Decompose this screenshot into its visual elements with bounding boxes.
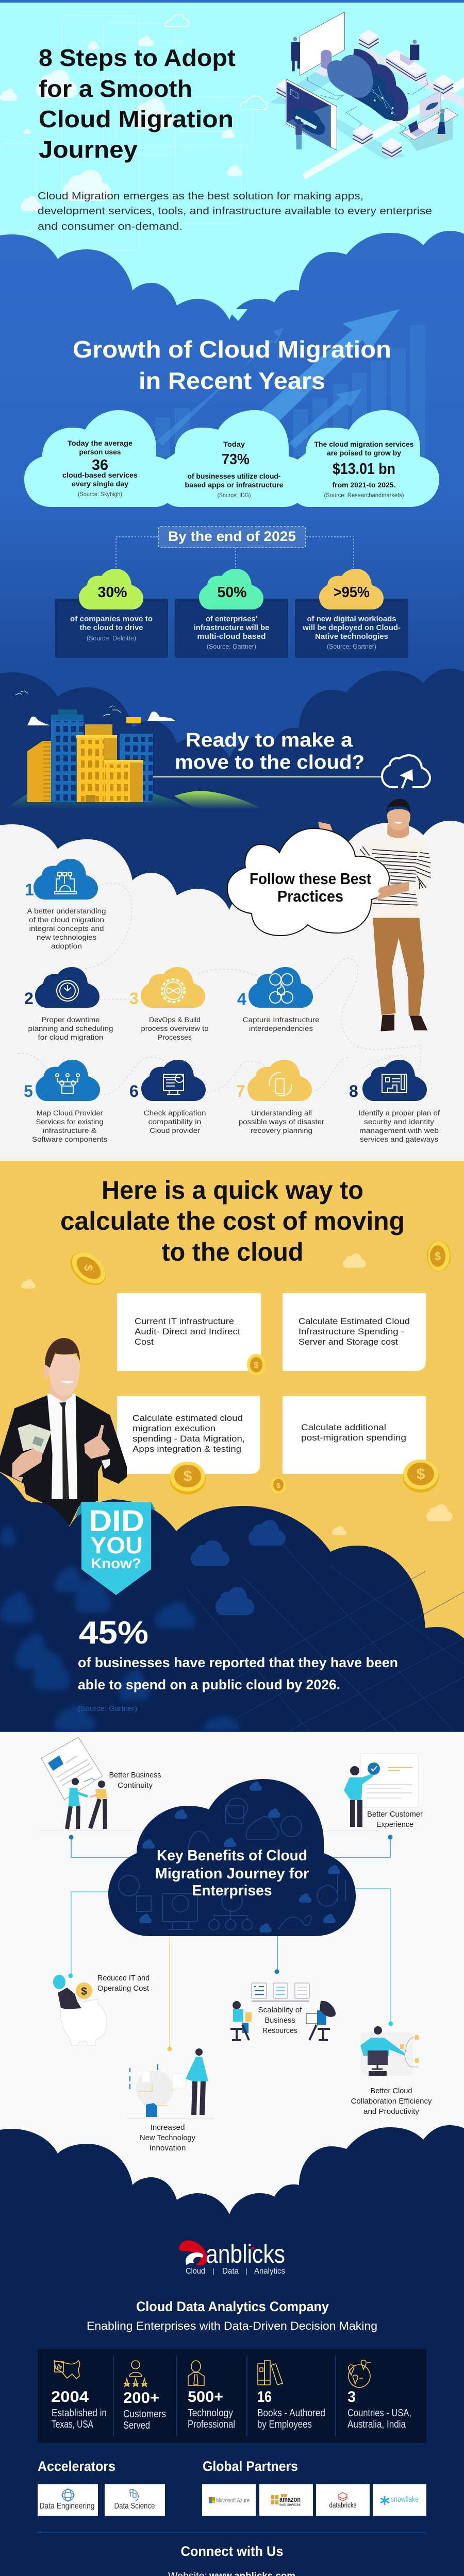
- step 3: Processes: [158, 1033, 192, 1041]
- logo: anblicks: Analytics: [254, 2267, 285, 2276]
- step 1: [25, 859, 106, 950]
- card: post-migration spending: Calculate additional: [301, 1422, 386, 1432]
- global partners: amazon: [279, 2495, 301, 2504]
- heading: cloud data analytics company: [87, 2299, 377, 2332]
- benefit: better cloud collaboration: [351, 2026, 432, 2116]
- step 7: possible ways of disaster: [239, 1117, 324, 1126]
- stat: 45 percent of businesses: 45%: [79, 1615, 148, 1651]
- stat: 16: by Employees: [257, 2419, 312, 2430]
- card: over 95% of workloads: [295, 569, 408, 658]
- global partners: Microsoft Azure: [216, 2497, 250, 2504]
- accelerators: Data Science: [114, 2502, 155, 2511]
- heading: quick way to calculate: to the cloud: [162, 1238, 303, 1266]
- heading: growth of cloud migration: Growth of Cloud Migration: [73, 336, 391, 363]
- logo: anblicks: |: [212, 2267, 214, 2275]
- accelerators: Data Engineering: [39, 2502, 95, 2511]
- heading: ready to make a move: Ready to make a: [186, 730, 353, 751]
- step 6: compatibility in: [148, 1117, 201, 1126]
- step 6: 6: [129, 1082, 139, 1100]
- stat: 36 cloud-based services: Today the average: [68, 439, 132, 447]
- stat: 3: Australia, India: [347, 2419, 406, 2430]
- card: 30% of companies: 30%: [98, 584, 127, 601]
- stat: 36 cloud-based services: every single day: [72, 480, 128, 488]
- heading: quick way to calculate: calculate the cost of moving: [60, 1207, 405, 1235]
- stat: 16: 16: [257, 2388, 272, 2405]
- icon: coins: $: [184, 1468, 192, 1485]
- card: 50% of enterprises: [175, 569, 288, 658]
- heading: by the end of 2025: [158, 527, 306, 548]
- stat: 500+: 500+: [188, 2388, 223, 2405]
- card: current IT audit: Cost: [135, 1337, 154, 1347]
- step 3: 3: [129, 989, 139, 1008]
- step 7: recovery planning: [251, 1126, 312, 1134]
- card: 30% of companies: [55, 569, 168, 658]
- benefit: better cloud collaboration: Better Cloud: [370, 2087, 412, 2095]
- stat: 2004: 2004: [51, 2388, 89, 2405]
- benefit: reduced IT and operating cost: $: [81, 1986, 87, 1997]
- stat: $13.01 bn: from 2021-to 2025.: [332, 481, 396, 489]
- heading: ready to make a move: move to the cloud?: [175, 752, 364, 773]
- step 5: Software components: [32, 1135, 107, 1143]
- heading: cloud data analytics company: Cloud Data Analytics Company: [136, 2299, 329, 2314]
- global partners: [202, 2459, 426, 2516]
- benefit: increased new technology innovation: New Technology: [140, 2133, 195, 2142]
- benefit: scalability of business resources: Business: [265, 2016, 295, 2025]
- step 3: [129, 967, 209, 1041]
- benefit: scalability of business resources: [230, 1983, 336, 2040]
- stat: 200+: 200+: [123, 2389, 159, 2406]
- stat: 200+: [123, 2361, 166, 2431]
- step 7: 7: [236, 1082, 245, 1100]
- card: migration execution spending: Apps integration & testing: [132, 1444, 241, 1454]
- card: post-migration spending: post-migration spending: [301, 1433, 406, 1443]
- heading: hero title: 8 Steps to Adopt: [39, 44, 236, 71]
- card: migration execution spending: migration execution: [132, 1423, 216, 1433]
- step 8: [349, 1060, 440, 1143]
- accelerators: [38, 2459, 165, 2516]
- icon: coins: $: [254, 1360, 259, 1370]
- presenter: businessman with money: [0, 1338, 127, 1526]
- step 5: Services for existing: [36, 1117, 103, 1126]
- panel: cost calculation: [0, 1161, 464, 1732]
- step 8: management with web: [359, 1126, 439, 1134]
- logo: anblicks: [179, 2240, 285, 2276]
- benefit: better cloud collaboration: and Productivity: [363, 2107, 419, 2116]
- card: over 95% of workloads: (Source: Gartner): [327, 642, 376, 650]
- connect with us: [88, 2544, 375, 2576]
- step 5: infrastructure &: [43, 1126, 97, 1134]
- stat: 2004: Established in: [52, 2408, 107, 2419]
- logo: anblicks: anblicks: [206, 2240, 285, 2268]
- benefit: better cloud collaboration: Collaboration Efficiency: [351, 2097, 432, 2106]
- step 6: Check application: [143, 1109, 206, 1117]
- benefit: reduced IT and operating cost: Operating Cost: [97, 1984, 150, 1993]
- stat: 73% of businesses: [185, 440, 284, 499]
- card: 30% of companies: the cloud to drive: [79, 623, 143, 632]
- step 1: of the cloud migration: [29, 916, 104, 924]
- stat: 16: Books - Authored: [257, 2408, 325, 2419]
- heading: quick way to calculate: [60, 1176, 405, 1266]
- benefit: better customer experience: Experience: [376, 1820, 413, 1829]
- logo: anblicks: Cloud: [186, 2267, 205, 2276]
- benefit: better customer experience: [328, 1754, 423, 1831]
- stat: 36 cloud-based services: cloud-based services: [62, 471, 138, 479]
- stat: $13.01 bn: $13.01 bn: [333, 460, 395, 478]
- stat: 45 percent of businesses: (Source: Gartner): [78, 1704, 137, 1713]
- step 2: planning and scheduling: [28, 1024, 113, 1032]
- card: 50% of enterprises: multi-cloud based: [197, 632, 266, 641]
- heading: growth of cloud migration: in Recent Years: [139, 367, 325, 394]
- stat: 500+: [188, 2361, 235, 2430]
- step 1: A better understanding: [27, 907, 106, 915]
- stat: $13.01 bn: (Source: Researchandmarkets): [324, 492, 404, 499]
- global partners: snowflake: [391, 2495, 419, 2504]
- step 6: Cloud provider: [150, 1126, 200, 1134]
- card: estimated infrastructure spending: Server and Storage cost: [299, 1337, 398, 1347]
- stat: 3: Countries - USA,: [347, 2408, 411, 2419]
- stat: 3: [347, 2360, 411, 2430]
- step 4: 4: [237, 990, 246, 1008]
- connectors: [68, 1835, 393, 2052]
- presenter: man in striped sweater: [355, 799, 431, 1031]
- stat: 3: 3: [347, 2388, 356, 2405]
- heading: quick way to calculate: Here is a quick way to: [102, 1176, 363, 1205]
- heading: hero title: Cloud Migration: [39, 106, 234, 132]
- card: estimated infrastructure spending: [283, 1293, 426, 1371]
- speech bubble: follow these best practices: Follow these Best: [250, 870, 371, 888]
- heading: cloud data analytics company: Enabling Enterprises with Data-Driven Decision Making: [87, 2319, 377, 2332]
- text block: hero intro: [38, 191, 432, 232]
- logo: anblicks: Data: [222, 2267, 239, 2276]
- heading: hero title: for a Smooth: [39, 75, 192, 102]
- step 1: new technologies: [37, 933, 96, 941]
- card: 30% of companies: (Source: Deloitte): [87, 634, 136, 642]
- stat: 500+: Professional: [188, 2419, 235, 2430]
- benefit: reduced IT and operating cost: Reduced IT and: [97, 1974, 150, 1982]
- card: over 95% of workloads: will be deployed on Cloud-: [302, 623, 401, 632]
- step 1: integral concepts and: [29, 924, 104, 933]
- step 4: [237, 967, 320, 1032]
- step 8: security and identity: [364, 1117, 434, 1126]
- step 7: [236, 1060, 324, 1134]
- ribbon: did you know: DID: [89, 1504, 144, 1538]
- stat: $13.01 bn: The cloud migration services: [314, 440, 414, 448]
- step 5: [24, 1060, 107, 1143]
- stat: 500+: Technology: [188, 2408, 233, 2419]
- stat: 36 cloud-based services: [62, 439, 138, 498]
- benefit: increased new technology innovation: Innovation: [150, 2144, 186, 2153]
- benefit: reduced IT and operating cost: [53, 1974, 150, 2045]
- panel: company stats: [38, 2349, 426, 2443]
- card: migration execution spending: Calculate estimated cloud: [132, 1413, 243, 1423]
- benefit: better business continuity: [39, 1737, 161, 1831]
- illustration: city: [6, 691, 263, 809]
- card: current IT audit: Current IT infrastructure: [135, 1316, 234, 1326]
- logo: anblicks: |: [245, 2267, 247, 2275]
- icon: coins: $: [276, 1481, 280, 1489]
- stat: 16: [257, 2361, 325, 2430]
- icon: cloud upload: [382, 755, 430, 788]
- step 2: [24, 967, 113, 1041]
- ribbon: did you know: [75, 1502, 155, 1595]
- speech bubble: follow these best practices: [227, 822, 409, 936]
- stat: 36 cloud-based services: (Source: Skyhigh): [78, 490, 122, 498]
- card: over 95% of workloads: of new digital workloads: [307, 615, 396, 623]
- stat: 36 cloud-based services: 36: [92, 457, 108, 473]
- global partners: databricks: [329, 2501, 357, 2509]
- benefit: increased new technology innovation: [127, 2048, 213, 2153]
- card: 50% of enterprises: infrastructure will be: [194, 623, 269, 632]
- stat: 73% of businesses: of businesses utilize cloud-: [188, 472, 281, 480]
- text block: hero intro: Cloud Migration emerges as the best solution for making apps,: [38, 191, 363, 202]
- step 2: for cloud migration: [38, 1033, 103, 1041]
- card: 30% of companies: of companies move to: [70, 615, 153, 623]
- text block: hero intro: and consumer on-demand.: [38, 221, 183, 232]
- stat: 200+: Served: [123, 2420, 150, 2431]
- stat: 45 percent of businesses: able to spend on a public cloud by 2026.: [78, 1677, 340, 1692]
- card: over 95% of workloads: Native technologies: [315, 632, 388, 641]
- stat: 200+: Customers: [123, 2409, 166, 2420]
- panel: footer background: [0, 2125, 464, 2576]
- card: estimated infrastructure spending: Calculate Estimated Cloud: [299, 1316, 410, 1326]
- speech bubble: follow these best practices: Practices: [277, 887, 343, 905]
- heading: growth of cloud migration: [73, 336, 391, 394]
- panel: ready to move: [0, 669, 464, 1200]
- icon: coins: [64, 1241, 451, 1495]
- card: over 95% of workloads: >95%: [334, 584, 370, 601]
- stat: $13.01 bn: are poised to grow by: [327, 449, 401, 457]
- step 3: DevOps & Build: [149, 1015, 201, 1024]
- global partners: Global Partners: [203, 2459, 298, 2474]
- icon: coins: $: [82, 1265, 95, 1271]
- stat: 2004: [51, 2361, 107, 2430]
- panel: growth of cloud migration: [0, 231, 464, 762]
- benefit: increased new technology innovation: Increased: [151, 2123, 185, 2132]
- icon: coins: $: [435, 1250, 441, 1263]
- benefit: better business continuity: Better Business: [109, 1771, 161, 1780]
- card: 50% of enterprises: 50%: [218, 584, 247, 601]
- central cloud: key benefits: [108, 1779, 356, 1936]
- step 4: Capture Infrastructure: [242, 1015, 320, 1024]
- stat: 73% of businesses: based apps or infrastructure: [185, 481, 284, 489]
- global partners: web services: [279, 2502, 301, 2507]
- step 8: Identify a proper plan of: [358, 1109, 440, 1117]
- stat: 73% of businesses: (Source: IDG): [218, 492, 251, 499]
- heading: ready to make a move: [175, 730, 364, 773]
- heading: by the end of 2025: By the end of 2025: [168, 529, 296, 544]
- ribbon: did you know: YOU: [90, 1532, 143, 1558]
- stat: 73% of businesses: 73%: [222, 451, 250, 468]
- benefit: scalability of business resources: Resources: [262, 2026, 297, 2035]
- panel: key benefits: [0, 1732, 464, 2227]
- card: migration execution spending: spending - Data Migration,: [132, 1434, 245, 1444]
- icon: coins: $: [417, 1466, 425, 1483]
- card: migration execution spending: [117, 1396, 260, 1474]
- card: estimated infrastructure spending: Infrastructure Spending -: [299, 1327, 404, 1336]
- card: current IT audit: Audit- Direct and Indirect: [135, 1327, 240, 1336]
- central cloud: key benefits: Key Benefits of Cloud: [157, 1848, 307, 1864]
- stat: 45 percent of businesses: [78, 1615, 398, 1713]
- step 5: 5: [24, 1082, 33, 1100]
- stat: $13.01 bn: [314, 440, 414, 499]
- step 8: 8: [349, 1082, 358, 1100]
- card: 50% of enterprises: of enterprises': [206, 615, 257, 623]
- stat: 73% of businesses: Today: [223, 440, 245, 448]
- benefit: better business continuity: Continuity: [118, 1781, 153, 1790]
- central cloud: key benefits: Enterprises: [192, 1883, 272, 1899]
- step 8: services and gateways: [360, 1135, 438, 1143]
- step 2: Proper downtime: [41, 1015, 100, 1024]
- central cloud: key benefits: Migration Journey for: [155, 1866, 309, 1882]
- text block: hero intro: development services, tools, and infrastructure available to every enterprise: [38, 206, 432, 217]
- panel: did you know: [0, 1472, 464, 1732]
- card: current IT audit: [117, 1293, 261, 1371]
- panel: best practices: [0, 821, 464, 1352]
- step 7: Understanding all: [251, 1109, 312, 1117]
- stat clouds: [24, 410, 439, 507]
- card: 50% of enterprises: (Source: Gartner): [207, 642, 256, 650]
- ribbon: did you know: Know?: [91, 1555, 141, 1571]
- connect with us: Connect with Us: [180, 2544, 284, 2559]
- step 5: Map Cloud Provider: [36, 1109, 103, 1117]
- step 2: 2: [24, 989, 34, 1008]
- benefit: better customer experience: Better Customer: [367, 1810, 423, 1819]
- step 1: 1: [25, 880, 34, 899]
- heading: hero title: Journey: [39, 136, 138, 163]
- step 6: [129, 1060, 206, 1134]
- benefit: scalability of business resources: Scalability of: [258, 2006, 302, 2014]
- step 4: interdependencies: [249, 1024, 313, 1032]
- stat: 45 percent of businesses: of businesses have reported that they have been: [78, 1655, 398, 1670]
- card: post-migration spending: [283, 1396, 426, 1474]
- stat: 36 cloud-based services: person uses: [79, 448, 121, 456]
- heading: hero title: [39, 44, 236, 163]
- stat: 2004: Texas, USA: [52, 2419, 94, 2430]
- hero panel: [0, 0, 464, 330]
- hero illustration: isometric cloud data center: [270, 12, 464, 179]
- accelerators: Accelerators: [38, 2459, 115, 2474]
- step 1: adoption: [51, 942, 82, 950]
- step 3: process overview to: [141, 1024, 209, 1032]
